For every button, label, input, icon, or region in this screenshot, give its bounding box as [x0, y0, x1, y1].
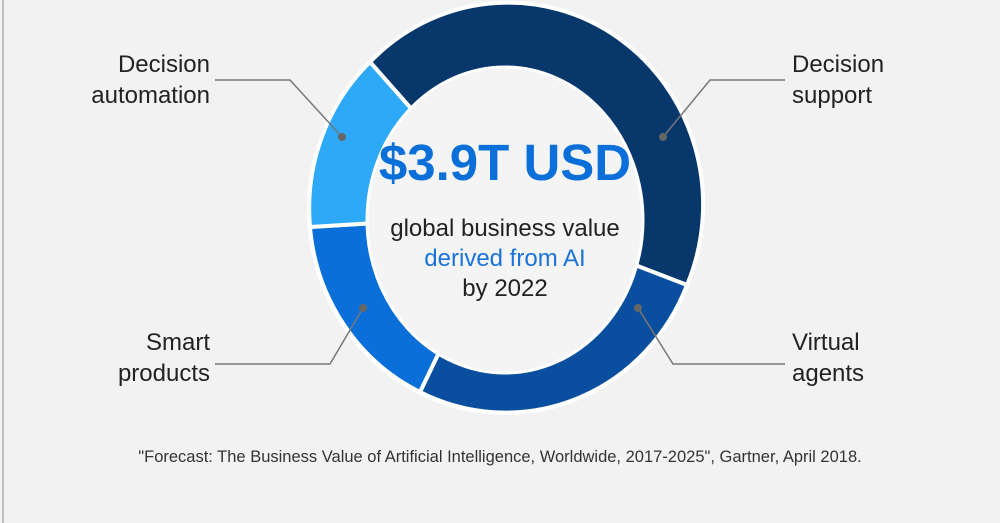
label: virtual agents: agents [792, 360, 864, 387]
segment: smart products [310, 215, 505, 392]
headline value: $3.9T USD [379, 134, 631, 191]
segment: virtual agents [420, 215, 687, 413]
center text: by 2022 [462, 275, 548, 302]
donut chart [309, 3, 703, 413]
label: decision support [792, 51, 884, 109]
center text [390, 215, 620, 302]
leader lines [215, 80, 785, 364]
label: decision automation [91, 51, 210, 109]
footnote: "Forecast: The Business Value of Artificial Intelligence, Worldwide, 2017-2025", Gartner, April 2018. [138, 448, 862, 466]
label: virtual agents: Virtual [792, 329, 860, 356]
label: decision automation: automation [91, 82, 210, 109]
center text: global business value [390, 215, 620, 242]
segment: decision automation [309, 62, 505, 227]
label: decision support: Decision [792, 51, 884, 78]
label: smart products: products [118, 360, 210, 387]
label: virtual agents [792, 329, 864, 387]
center text: derived from AI [424, 245, 586, 272]
segment: decision support [370, 3, 703, 285]
label: decision support: support [792, 82, 872, 109]
label: decision automation: Decision [118, 51, 210, 78]
label: smart products [118, 329, 210, 387]
label: smart products: Smart [146, 329, 210, 356]
center disc [367, 67, 643, 373]
